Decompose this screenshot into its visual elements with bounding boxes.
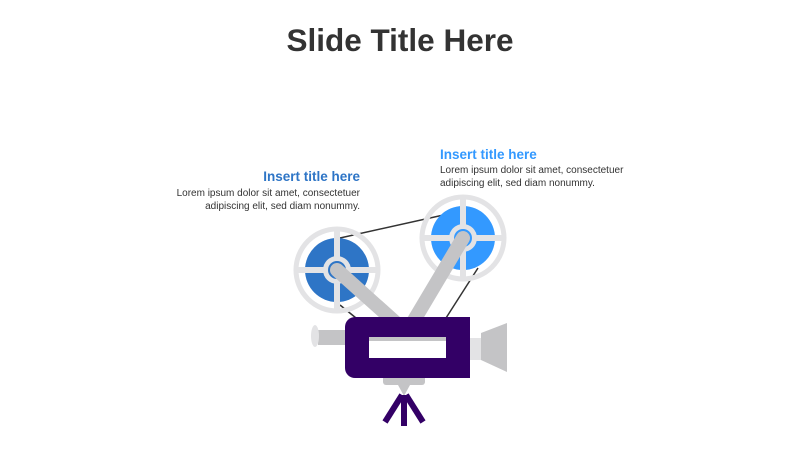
text block: right: Lorem ipsum dolor sit amet, consectetuer — [440, 165, 623, 176]
text block: left — [177, 169, 360, 212]
arms — [337, 238, 463, 322]
lens — [468, 323, 507, 372]
handle — [311, 325, 348, 347]
title: Slide Title Here — [286, 22, 514, 58]
text block: right — [440, 147, 624, 189]
text block: left: adipiscing elit, sed diam nonummy. — [205, 201, 360, 212]
camera body — [345, 317, 470, 378]
text block: left: Lorem ipsum dolor sit amet, consectetuer — [177, 188, 360, 199]
text block: right: adipiscing elit, sed diam nonummy. — [440, 178, 595, 189]
reel: right — [422, 197, 504, 279]
film lines — [340, 214, 478, 318]
reel: left — [296, 229, 378, 311]
text block: left: Insert title here — [263, 169, 360, 184]
text block: right: Insert title here — [440, 147, 537, 162]
tripod — [383, 374, 425, 426]
